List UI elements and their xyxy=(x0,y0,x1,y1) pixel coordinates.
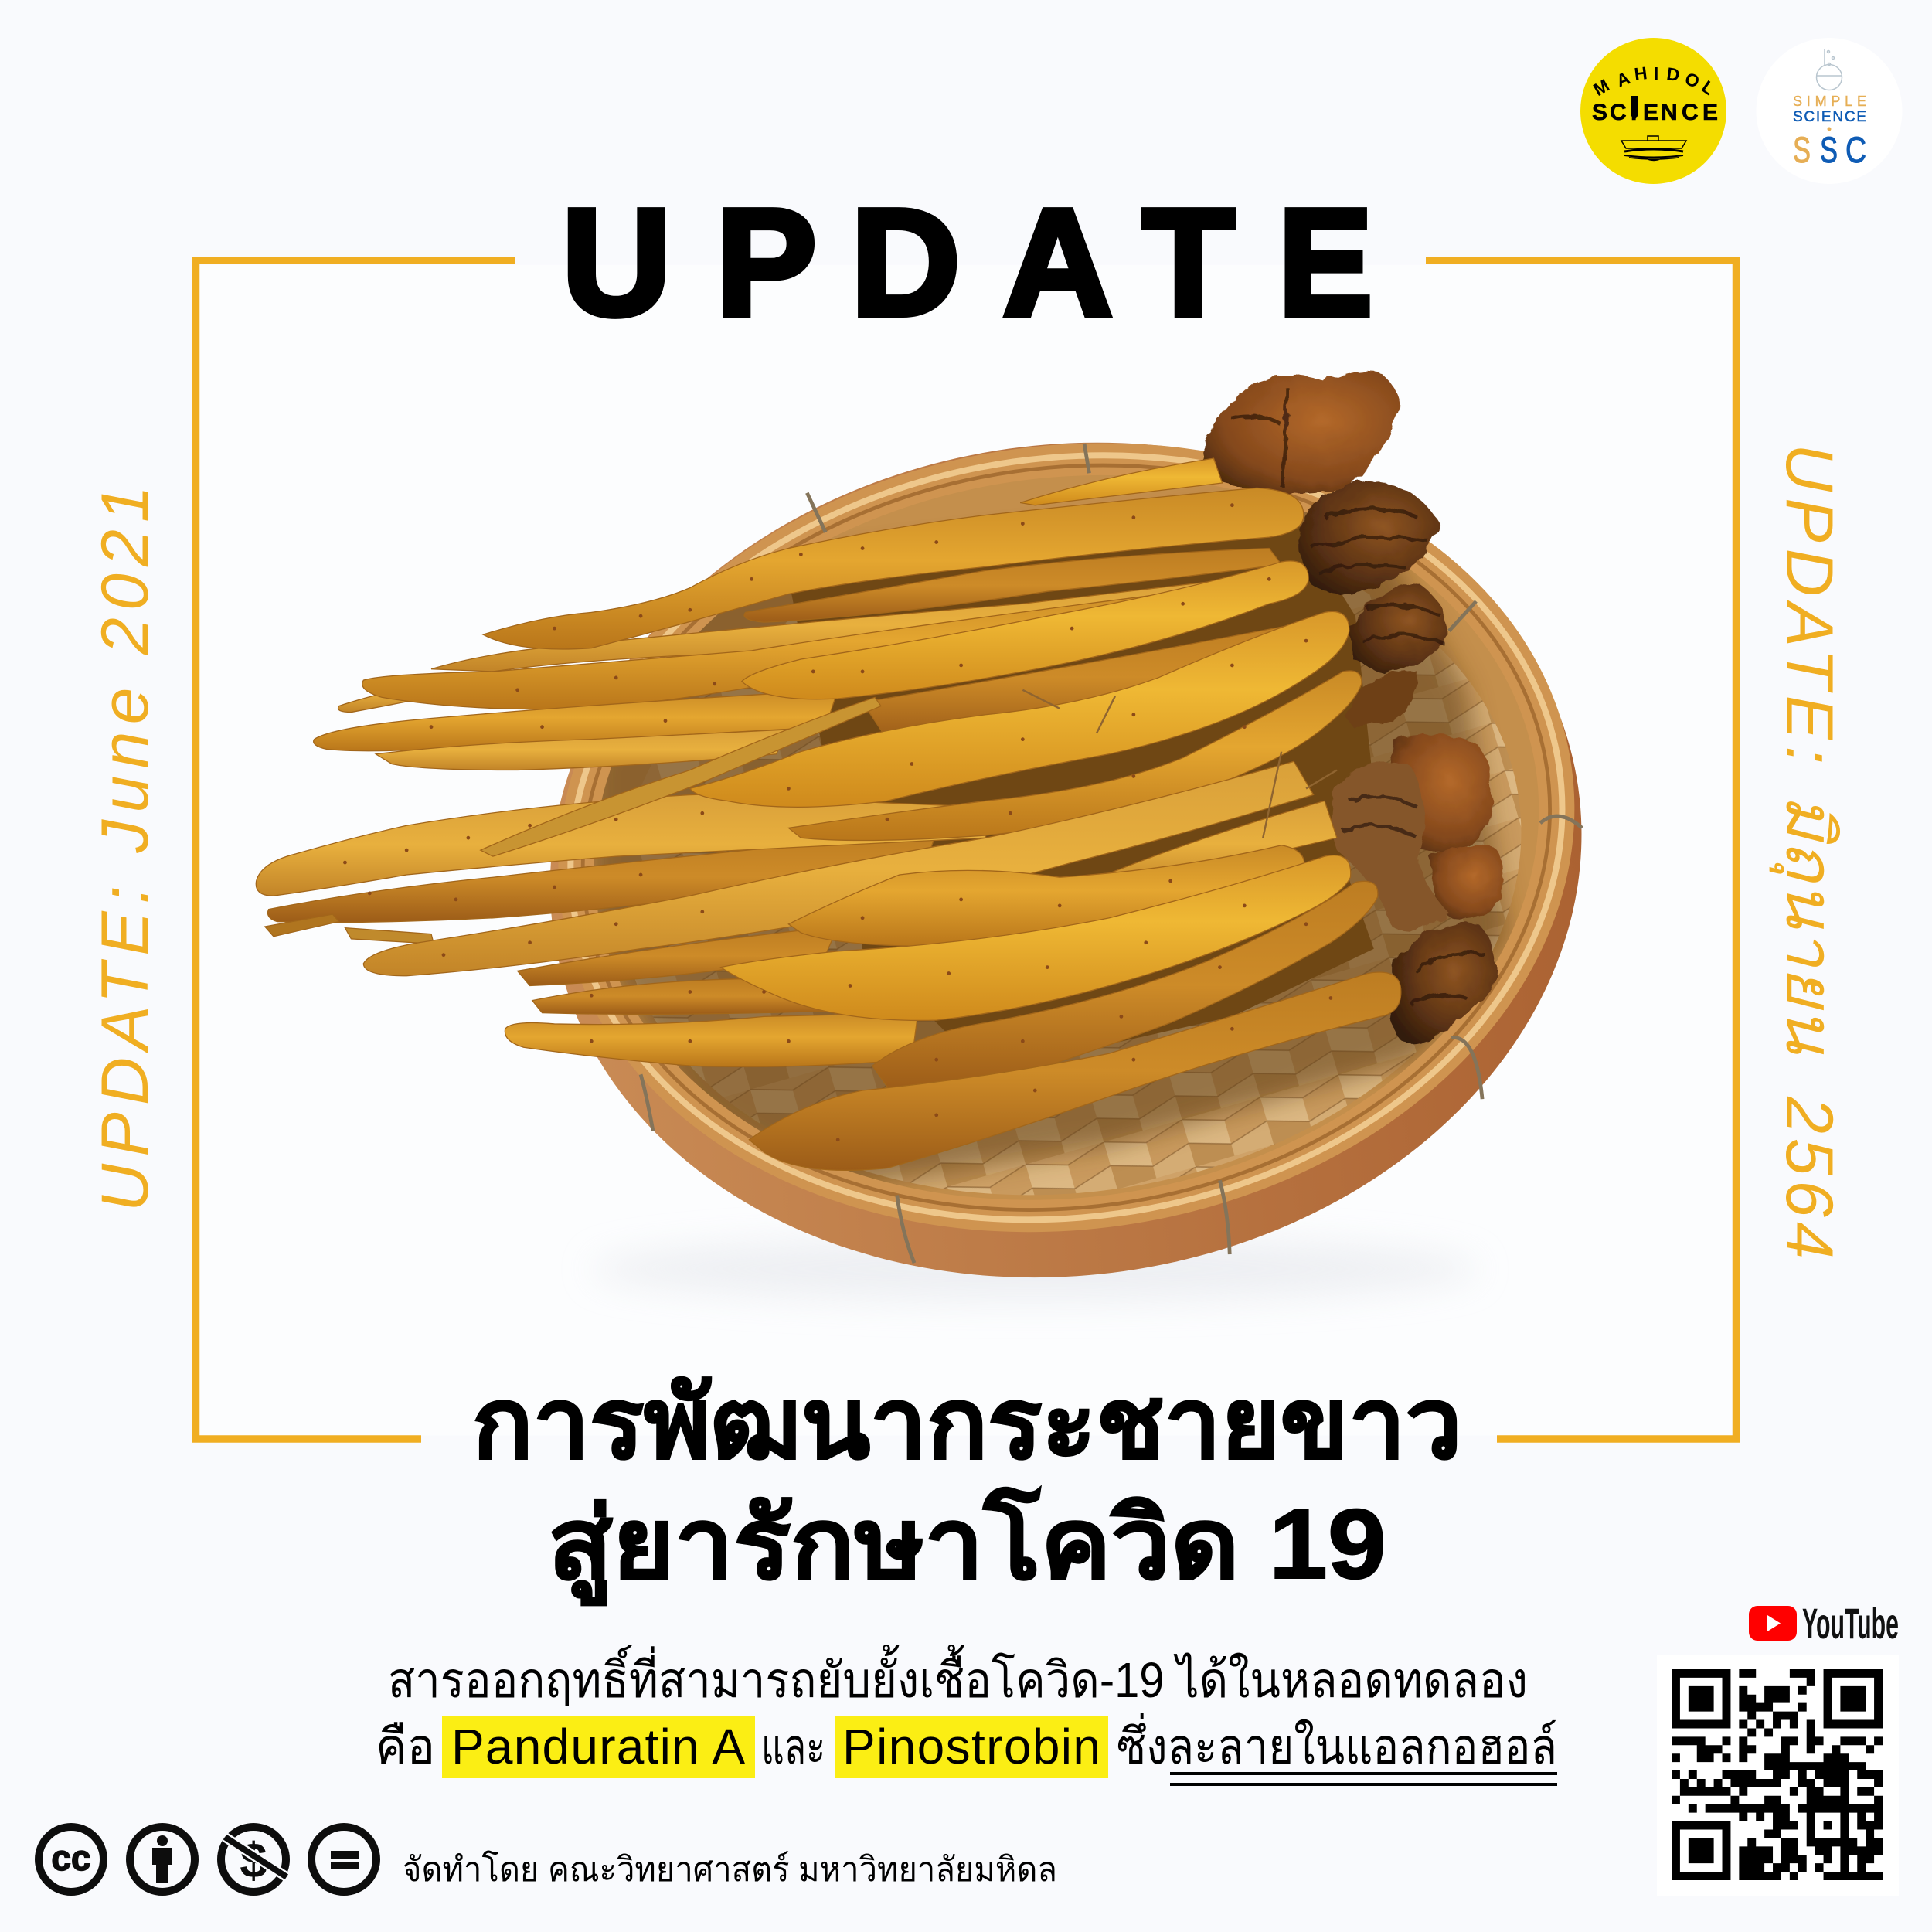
date label: UPDATE: xyxy=(1772,444,1846,764)
icon: non-commercial xyxy=(221,1827,291,1892)
dot xyxy=(1827,127,1832,131)
SCIENCE wordmark: SCIENCE xyxy=(1793,109,1866,125)
body line 1: สารออกฤทธิ์ที่สามารถยับยั้งเชื้อโควิด-19 ได้ในหลอดทดลอง xyxy=(388,1645,1528,1708)
SSC letters xyxy=(1793,129,1866,170)
SSC letters: C xyxy=(1845,129,1866,170)
word: and: และ xyxy=(761,1719,825,1774)
title: UPDATE: E xyxy=(1278,178,1372,347)
compound: Panduratin A: Panduratin A xyxy=(451,1719,745,1774)
credit line: จัดทำโดย คณะวิทยาศาสตร์ มหาวิทยาลัยมหิดล xyxy=(403,1850,1057,1889)
logo arc lettering: O xyxy=(1682,68,1702,92)
bamboo tray xyxy=(495,377,1636,1343)
logo arc lettering xyxy=(1590,63,1719,100)
flask icon xyxy=(1816,49,1842,90)
compound: Pinostrobin: Pinostrobin xyxy=(842,1719,1100,1774)
title: UPDATE: UPDAT xyxy=(562,178,1235,347)
icon: non-commercial: $ xyxy=(240,1832,267,1888)
logo wordmark: SCIENCE xyxy=(1592,100,1718,125)
body line 2 with highlighted compound names xyxy=(376,1713,1557,1784)
root speckles xyxy=(345,505,1331,1140)
photo white backdrop xyxy=(199,265,1733,1435)
logo arc lettering: H xyxy=(1633,63,1648,84)
SSC letters: S xyxy=(1793,129,1811,170)
word: meaning is: คือ xyxy=(376,1719,435,1774)
icon: attribution xyxy=(130,1827,195,1892)
Thai month: มิถุนายน xyxy=(1769,794,1846,1055)
left vertical date: UPDATE: June 2021 xyxy=(88,485,162,1212)
phrase: dissolves in alcohol: ซึ่งละลายในแอลกอฮอล์ xyxy=(1117,1713,1557,1774)
SIMPLE wordmark: SIMPLE xyxy=(1793,94,1866,109)
logo arc lettering: M xyxy=(1590,75,1613,100)
heading line 1: การพัฒนากระชายขาว xyxy=(472,1369,1462,1479)
QR code xyxy=(1657,1655,1899,1896)
tray wire bindings xyxy=(641,444,1582,1263)
highlight: Panduratin A xyxy=(442,1716,755,1778)
logo: Mahidol Science xyxy=(1580,38,1726,184)
logo arc lettering: I xyxy=(1654,63,1658,83)
icon: CC xyxy=(39,1827,104,1892)
double underline xyxy=(1170,1774,1557,1784)
rhizome ridges xyxy=(1232,388,1485,1004)
logo arc lettering: A xyxy=(1614,67,1633,91)
logo building icon xyxy=(1621,136,1686,161)
orange frame xyxy=(196,260,1736,1439)
SSC letters: S xyxy=(1820,129,1838,170)
icon: no derivatives xyxy=(311,1827,376,1892)
root shadow on the tray xyxy=(591,493,1509,1189)
right vertical date xyxy=(1769,444,1846,1259)
highlight: Pinostrobin xyxy=(835,1716,1108,1778)
logo arc lettering: D xyxy=(1665,63,1681,85)
tray shadow xyxy=(591,1237,1478,1301)
test tube letter xyxy=(1631,96,1638,119)
rhizomes xyxy=(1202,371,1504,1045)
photo: bamboo tray of fingerroot xyxy=(255,371,1583,1289)
fingerroot roots xyxy=(256,458,1401,1170)
root fibres xyxy=(1022,690,1337,838)
logo arc lettering: L xyxy=(1698,77,1719,99)
heading line 2: สู่ยารักษาโควิด 19 xyxy=(548,1486,1386,1606)
icon: CC: cc xyxy=(51,1838,91,1878)
logo: Simple Science SSC xyxy=(1756,38,1903,184)
Thai year: 2564 xyxy=(1772,1096,1846,1259)
Creative Commons licence icons xyxy=(39,1827,376,1892)
icon: YouTube logo xyxy=(1749,1599,1899,1648)
